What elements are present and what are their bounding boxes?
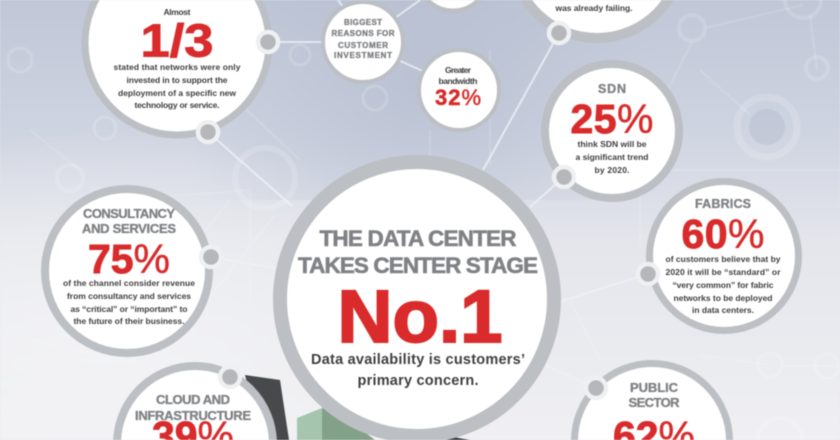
- heading: consultancy and services: [82, 206, 176, 236]
- heading: public sector: SECTOR: [628, 395, 680, 410]
- heading: cloud and infrastructure: CLOUD AND: [156, 392, 230, 407]
- connector node: public sector: [586, 378, 606, 398]
- text: SDN description: [576, 139, 648, 175]
- heading: public sector: [628, 380, 680, 410]
- title: THE DATA CENTER: [320, 226, 516, 251]
- text: greater bandwidth: bandwidth: [438, 76, 478, 86]
- text: consultancy description: of the channel consider revenue: [63, 278, 195, 288]
- text: fabrics description: “very common” for fabric: [672, 280, 774, 290]
- panel: top small circle: [417, 0, 489, 11]
- panel: public sector: [574, 364, 730, 440]
- heading: consultancy and services: CONSULTANCY: [83, 206, 175, 221]
- text: networks description: invested in to support the: [126, 75, 228, 85]
- text: SDN description: a significant trend: [576, 152, 648, 162]
- text: greater bandwidth: Greater: [445, 65, 472, 75]
- text: data availability: [311, 352, 525, 389]
- panel: the data center takes center stage: [280, 162, 554, 436]
- heading: cloud and infrastructure: [135, 392, 251, 423]
- text: SDN description: by 2020.: [594, 165, 630, 175]
- text: fabrics description: of customers believe that by: [666, 254, 781, 264]
- text: SDN description: think SDN will be: [578, 139, 647, 149]
- panel: almost one third: [85, 0, 269, 135]
- heading: biggest reasons: REASONS FOR: [332, 29, 395, 38]
- text: networks description: [114, 62, 241, 110]
- panel: greater bandwidth: [419, 50, 499, 130]
- heading: biggest reasons: BIGGEST: [344, 18, 382, 27]
- heading: fabrics: FABRICS: [695, 197, 751, 211]
- text: fabrics description: [666, 254, 781, 315]
- text: fabrics description: networks to be deployed: [674, 293, 772, 303]
- heading: biggest reasons: [332, 18, 395, 60]
- text: networks description: deployment of a specific new: [118, 88, 236, 98]
- illustration: green server block: [297, 408, 470, 440]
- text: consultancy description: the future of their business.: [74, 316, 184, 326]
- stat: 25%: 25%: [570, 96, 654, 142]
- panel: already failing: [512, 0, 682, 38]
- panel: SDN: [545, 64, 679, 198]
- connector lines: [208, 0, 648, 388]
- stat: 75%: 75%: [88, 236, 170, 282]
- text: data availability: Data availability is customers’: [311, 352, 525, 368]
- panel: cloud and infrastructure: [117, 366, 273, 440]
- panel: fabrics: [650, 182, 798, 330]
- panel: consultancy and services: [45, 189, 209, 353]
- text: consultancy description: from consultancy and services: [67, 291, 191, 301]
- heading: biggest reasons: INVESTMENT: [334, 51, 392, 60]
- connector node: one third right: [258, 32, 278, 52]
- connector node: fabrics: [638, 264, 658, 284]
- stat: 1/3: 1/3: [140, 14, 214, 66]
- text: networks description: technology or service.: [134, 100, 220, 110]
- text: greater bandwidth: [438, 65, 478, 86]
- panel: biggest reasons: [323, 2, 403, 82]
- heading: consultancy and services: AND SERVICES: [82, 221, 176, 236]
- text: consultancy description: as “critical” or “important” to: [70, 304, 188, 314]
- heading: SDN: SDN: [598, 82, 626, 96]
- title: [298, 226, 538, 278]
- connector node: consultancy: [201, 247, 221, 267]
- text: networks description: stated that networks were only: [114, 62, 241, 72]
- text: data availability: primary concern.: [358, 373, 478, 389]
- heading: biggest reasons: CUSTOMER: [338, 41, 388, 50]
- heading: public sector: PUBLIC: [630, 380, 679, 395]
- stat: No.1: No.1: [338, 275, 502, 358]
- text: already failing: was already failing.: [554, 3, 632, 13]
- title: TAKES CENTER STAGE: [298, 253, 538, 278]
- connector node: cloud: [220, 367, 240, 387]
- connector node: already failing: [549, 23, 569, 43]
- stat: 32%: 32%: [435, 85, 481, 110]
- stat: 60%: 60%: [682, 211, 764, 257]
- illustration: dark server shape: [245, 375, 289, 440]
- connector node: SDN: [554, 167, 574, 187]
- heading: cloud and infrastructure: INFRASTRUCTURE: [135, 408, 251, 423]
- text: fabrics description: in data centers.: [692, 305, 754, 315]
- connector node: one third bottom: [198, 122, 218, 142]
- text: consultancy description: [63, 278, 195, 326]
- text: fabrics description: 2020 it will be “standard” or: [666, 267, 781, 277]
- text: almost: Almost: [164, 7, 191, 17]
